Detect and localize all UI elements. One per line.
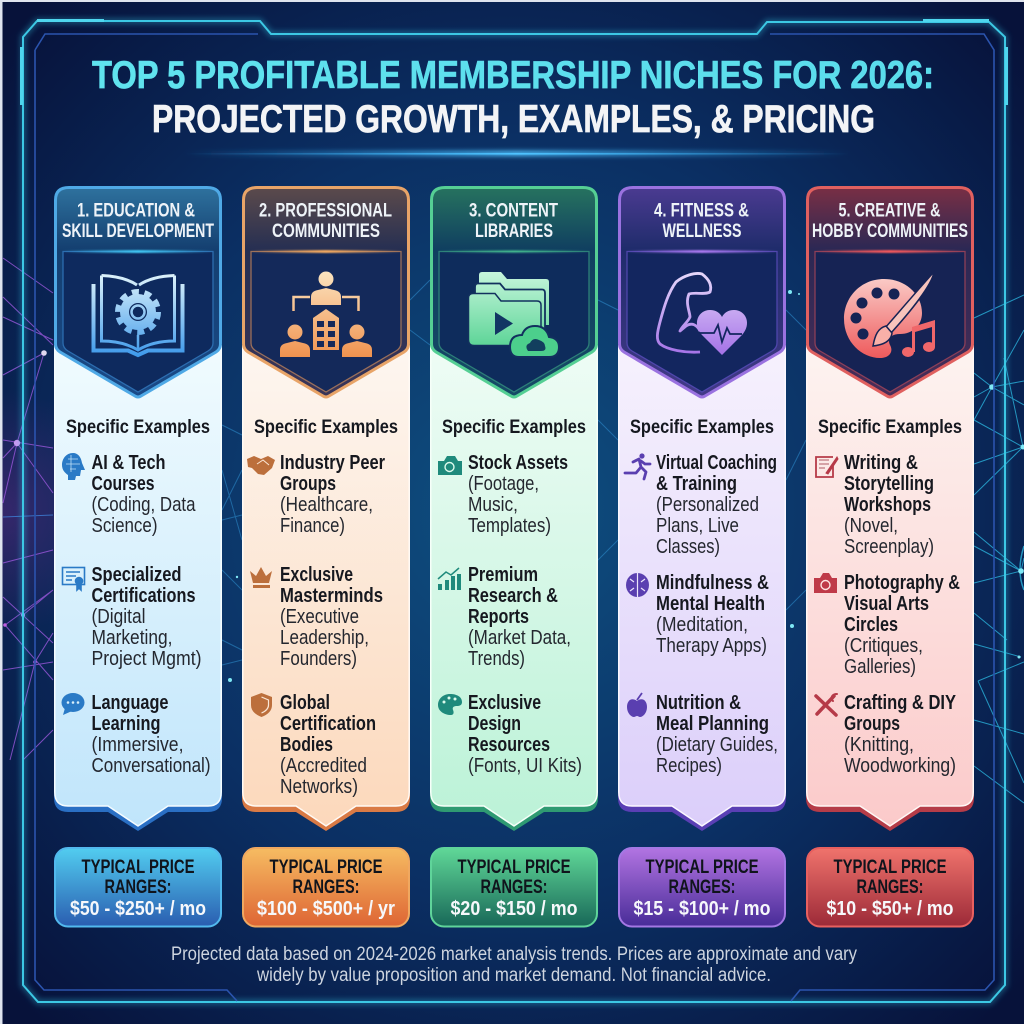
example: nutrition: (Dietary Guides,	[656, 734, 778, 756]
example: industry peer groups: Groups	[280, 473, 336, 495]
card body	[430, 346, 598, 831]
example: research and reports: (Market Data,	[468, 627, 571, 649]
card body	[618, 346, 786, 831]
icon: shield	[251, 693, 272, 717]
example: research and reports: Trends)	[468, 648, 525, 670]
header shield	[620, 188, 784, 397]
example: mindfulness: Mental Health	[656, 593, 765, 615]
icon: runner	[625, 453, 650, 479]
example: design resources: (Fonts, UI Kits)	[468, 755, 582, 777]
example: stock assets	[468, 452, 568, 537]
heading: SKILL DEVELOPMENT	[62, 221, 214, 242]
price box: $100 - $500+ / yr	[257, 898, 395, 920]
example: stock assets: Music,	[468, 494, 518, 516]
example: language learning: Language	[92, 692, 168, 714]
examples heading: Specific Examples	[442, 417, 586, 438]
heading	[812, 200, 968, 242]
example: certification bodies: Certification	[280, 713, 376, 735]
heading	[654, 200, 749, 242]
icon: apple	[627, 693, 647, 717]
icon: speech bubble	[62, 693, 84, 715]
example: crafting groups: (Knitting,	[844, 734, 914, 756]
example: exclusive masterminds: Masterminds	[280, 585, 383, 607]
footer disclaimer: widely by value proposition and market demand. Not financial advice.	[256, 965, 771, 986]
price box: RANGES:	[480, 876, 548, 898]
price box	[55, 848, 221, 926]
example: writing workshops: Workshops	[844, 494, 931, 516]
panel: content libraries	[430, 188, 598, 926]
icon: crown	[250, 567, 272, 588]
heading: 2. PROFESSIONAL	[259, 200, 392, 222]
example: writing workshops: Writing &	[844, 452, 918, 474]
heading: LIBRARIES	[475, 221, 553, 242]
example: crafting groups	[844, 692, 957, 777]
icon: folders with cloud	[468, 272, 559, 357]
example: language learning: Learning	[92, 713, 160, 735]
price box	[807, 848, 973, 926]
panel: education and skill development	[54, 188, 222, 926]
example: research and reports: Premium	[468, 564, 538, 586]
example: crafting groups: Groups	[844, 713, 900, 735]
header shield	[432, 188, 596, 397]
example: industry peer groups: Finance)	[280, 515, 345, 537]
icon: professional network	[280, 272, 372, 357]
price box: RANGES:	[104, 876, 172, 898]
example: certifications: Certifications	[92, 585, 196, 607]
example: certifications: Specialized	[92, 564, 182, 586]
heading	[62, 200, 214, 242]
example: exclusive masterminds: Exclusive	[280, 564, 353, 586]
price box: RANGES:	[668, 876, 736, 898]
header shield	[244, 188, 408, 397]
example: virtual coaching: & Training	[656, 473, 737, 495]
example: design resources: Exclusive	[468, 692, 541, 714]
icon: crossed tools	[816, 694, 837, 715]
icon: growth chart	[438, 568, 461, 590]
price box: RANGES:	[292, 876, 360, 898]
example: certifications: (Digital	[92, 606, 146, 628]
example: language learning: Conversational)	[92, 755, 210, 777]
footer disclaimer: Projected data based on 2024-2026 market analysis trends. Prices are approximate and vary	[171, 944, 857, 965]
example: AI and tech: (Coding, Data	[92, 494, 196, 516]
example: writing workshops: (Novel,	[844, 515, 898, 537]
example: industry peer groups: (Healthcare,	[280, 494, 373, 516]
example: writing workshops: Storytelling	[844, 473, 934, 495]
header shield	[56, 188, 220, 397]
example: nutrition: Recipes)	[656, 755, 722, 777]
example: stock assets: Templates)	[468, 515, 551, 537]
card body	[54, 346, 222, 831]
example: AI and tech: Courses	[92, 473, 154, 495]
heading: HOBBY COMMUNITIES	[812, 221, 968, 242]
icon: notepad and pen	[816, 457, 838, 477]
price box: TYPICAL PRICE	[270, 856, 382, 878]
example: virtual coaching: Virtual Coaching	[656, 452, 777, 474]
example: photography: (Critiques,	[844, 635, 923, 657]
example: exclusive masterminds	[280, 564, 383, 670]
example: certifications: Project Mgmt)	[92, 648, 202, 670]
example: virtual coaching: (Personalized	[656, 494, 759, 516]
example: crafting groups: Woodworking)	[844, 755, 956, 777]
example: certification bodies: Networks)	[280, 776, 358, 798]
example: photography: Visual Arts	[844, 593, 929, 615]
example: mindfulness: Therapy Apps)	[656, 635, 767, 657]
card body	[242, 346, 410, 831]
example: certification bodies: (Accredited	[280, 755, 367, 777]
example: design resources: Resources	[468, 734, 550, 756]
heading: 5. CREATIVE &	[838, 200, 941, 222]
icon: palette, brush and note	[844, 272, 935, 358]
heading: COMMUNITIES	[272, 221, 380, 242]
example: research and reports	[468, 564, 571, 670]
price box	[619, 848, 785, 926]
price box: $50 - $250+ / mo	[70, 898, 206, 920]
title: PROJECTED GROWTH, EXAMPLES, & PRICING	[152, 98, 875, 141]
example: exclusive masterminds: Leadership,	[280, 627, 369, 649]
price box: TYPICAL PRICE	[646, 856, 758, 878]
example: exclusive masterminds: Founders)	[280, 648, 357, 670]
heading: 3. CONTENT	[469, 200, 558, 222]
panel: creative and hobby communities	[806, 188, 974, 926]
examples heading: Specific Examples	[254, 417, 398, 438]
examples heading: Specific Examples	[630, 417, 774, 438]
icon: palette	[438, 694, 462, 715]
example: language learning: (Immersive,	[92, 734, 184, 756]
example: writing workshops: Screenplay)	[844, 536, 934, 558]
heading: WELLNESS	[662, 221, 742, 242]
price box	[243, 848, 409, 926]
price box: TYPICAL PRICE	[82, 856, 194, 878]
example: AI and tech: AI & Tech	[92, 452, 166, 474]
example: nutrition: Meal Planning	[656, 713, 769, 735]
example: certifications: Marketing,	[92, 627, 172, 649]
example: crafting groups: Crafting & DIY	[844, 692, 957, 714]
example: photography: Circles	[844, 614, 898, 636]
example: nutrition	[656, 692, 778, 777]
example: design resources	[468, 692, 582, 777]
icon: camera	[438, 456, 462, 475]
example: photography	[844, 572, 960, 678]
example: writing workshops	[844, 452, 934, 558]
example: industry peer groups	[280, 452, 385, 537]
example: exclusive masterminds: (Executive	[280, 606, 359, 628]
price box: TYPICAL PRICE	[458, 856, 570, 878]
title	[92, 54, 934, 141]
heading	[259, 200, 392, 242]
example: stock assets: (Footage,	[468, 473, 539, 495]
example: design resources: Design	[468, 713, 521, 735]
example: research and reports: Reports	[468, 606, 529, 628]
title divider	[185, 151, 850, 156]
example: AI and tech: Science)	[92, 515, 158, 537]
example: certification bodies	[280, 692, 376, 798]
panel: professional communities	[242, 188, 410, 926]
price box: TYPICAL PRICE	[834, 856, 946, 878]
example: certification bodies: Global	[280, 692, 330, 714]
examples heading: Specific Examples	[66, 417, 210, 438]
price box	[431, 848, 597, 926]
example: language learning	[92, 692, 210, 777]
network pattern: left and between columns	[3, 258, 806, 760]
icon: brain head	[62, 453, 85, 480]
example: research and reports: Research &	[468, 585, 558, 607]
example: stock assets: Stock Assets	[468, 452, 568, 474]
example: nutrition: Nutrition &	[656, 692, 741, 714]
examples heading: Specific Examples	[818, 417, 962, 438]
icon: camera	[814, 573, 837, 593]
network pattern: right side	[974, 295, 1024, 803]
icon: certificate	[62, 568, 84, 590]
network nodes	[3, 290, 1024, 682]
heading	[469, 200, 558, 242]
example: photography: Galleries)	[844, 656, 916, 678]
price box: $10 - $50+ / mo	[826, 898, 954, 920]
example: mindfulness	[656, 572, 769, 657]
example: virtual coaching: Classes)	[656, 536, 720, 558]
icon: book with gear	[94, 276, 182, 355]
price box: RANGES:	[856, 876, 924, 898]
example: industry peer groups: Industry Peer	[280, 452, 385, 474]
price box: $20 - $150 / mo	[450, 898, 578, 920]
example: mindfulness: (Meditation,	[656, 614, 748, 636]
header shield	[808, 188, 972, 397]
example: AI and tech	[92, 452, 196, 537]
example: certification bodies: Bodies	[280, 734, 333, 756]
card body	[806, 346, 974, 831]
example: virtual coaching: Plans, Live	[656, 515, 739, 537]
example: certifications	[92, 564, 202, 670]
example: photography: Photography &	[844, 572, 960, 594]
panel: fitness and wellness	[618, 188, 786, 926]
heading: 1. EDUCATION &	[77, 200, 195, 222]
icon: brain	[626, 573, 649, 597]
icon: handshake	[247, 456, 275, 475]
example: mindfulness: Mindfulness &	[656, 572, 769, 594]
heading: 4. FITNESS &	[654, 200, 749, 222]
example: virtual coaching	[656, 452, 777, 558]
icon: muscle arm and heart	[657, 273, 747, 355]
footer disclaimer	[171, 944, 857, 986]
price box: $15 - $100+ / mo	[634, 898, 770, 920]
